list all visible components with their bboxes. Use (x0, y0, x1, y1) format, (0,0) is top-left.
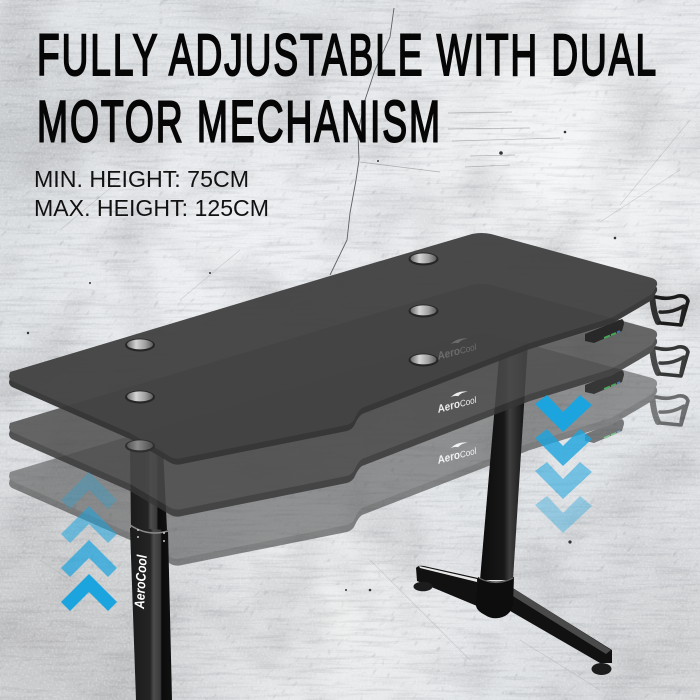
lowest desktop ghost (9, 333, 688, 566)
title (37, 23, 658, 154)
logo on lowest desktop (437, 439, 477, 467)
top desktop (9, 233, 688, 465)
right desk leg and base (414, 342, 612, 675)
left base arm (416, 566, 478, 606)
left foot (414, 582, 432, 591)
wall specks (27, 131, 616, 591)
collar ring (479, 578, 513, 582)
logo on top desktop (437, 335, 477, 363)
cable grommets (125, 252, 438, 452)
arrows down (535, 395, 592, 533)
maximum height: MAX. HEIGHT: 125CM (34, 195, 269, 221)
collar ring (130, 525, 168, 533)
height specifications (34, 166, 269, 221)
right arm top face (508, 588, 611, 654)
minimum height: MIN. HEIGHT: 75CM (34, 166, 249, 192)
upper column (130, 447, 167, 530)
leg collar (476, 577, 514, 618)
right foot (592, 663, 612, 675)
lower column (130, 528, 172, 700)
AeroCool leg logo: AeroCool (131, 553, 150, 610)
base arm highlight (419, 566, 477, 582)
collar screws (137, 529, 165, 542)
middle desktop (9, 284, 688, 517)
right leg column (480, 342, 528, 580)
wall crack (330, 8, 394, 275)
left desk leg (130, 447, 172, 700)
arrows up (61, 472, 117, 611)
logo on middle desktop (437, 388, 477, 416)
right base arm (505, 587, 612, 663)
title line 2: MOTOR MECHANISM (37, 90, 442, 154)
